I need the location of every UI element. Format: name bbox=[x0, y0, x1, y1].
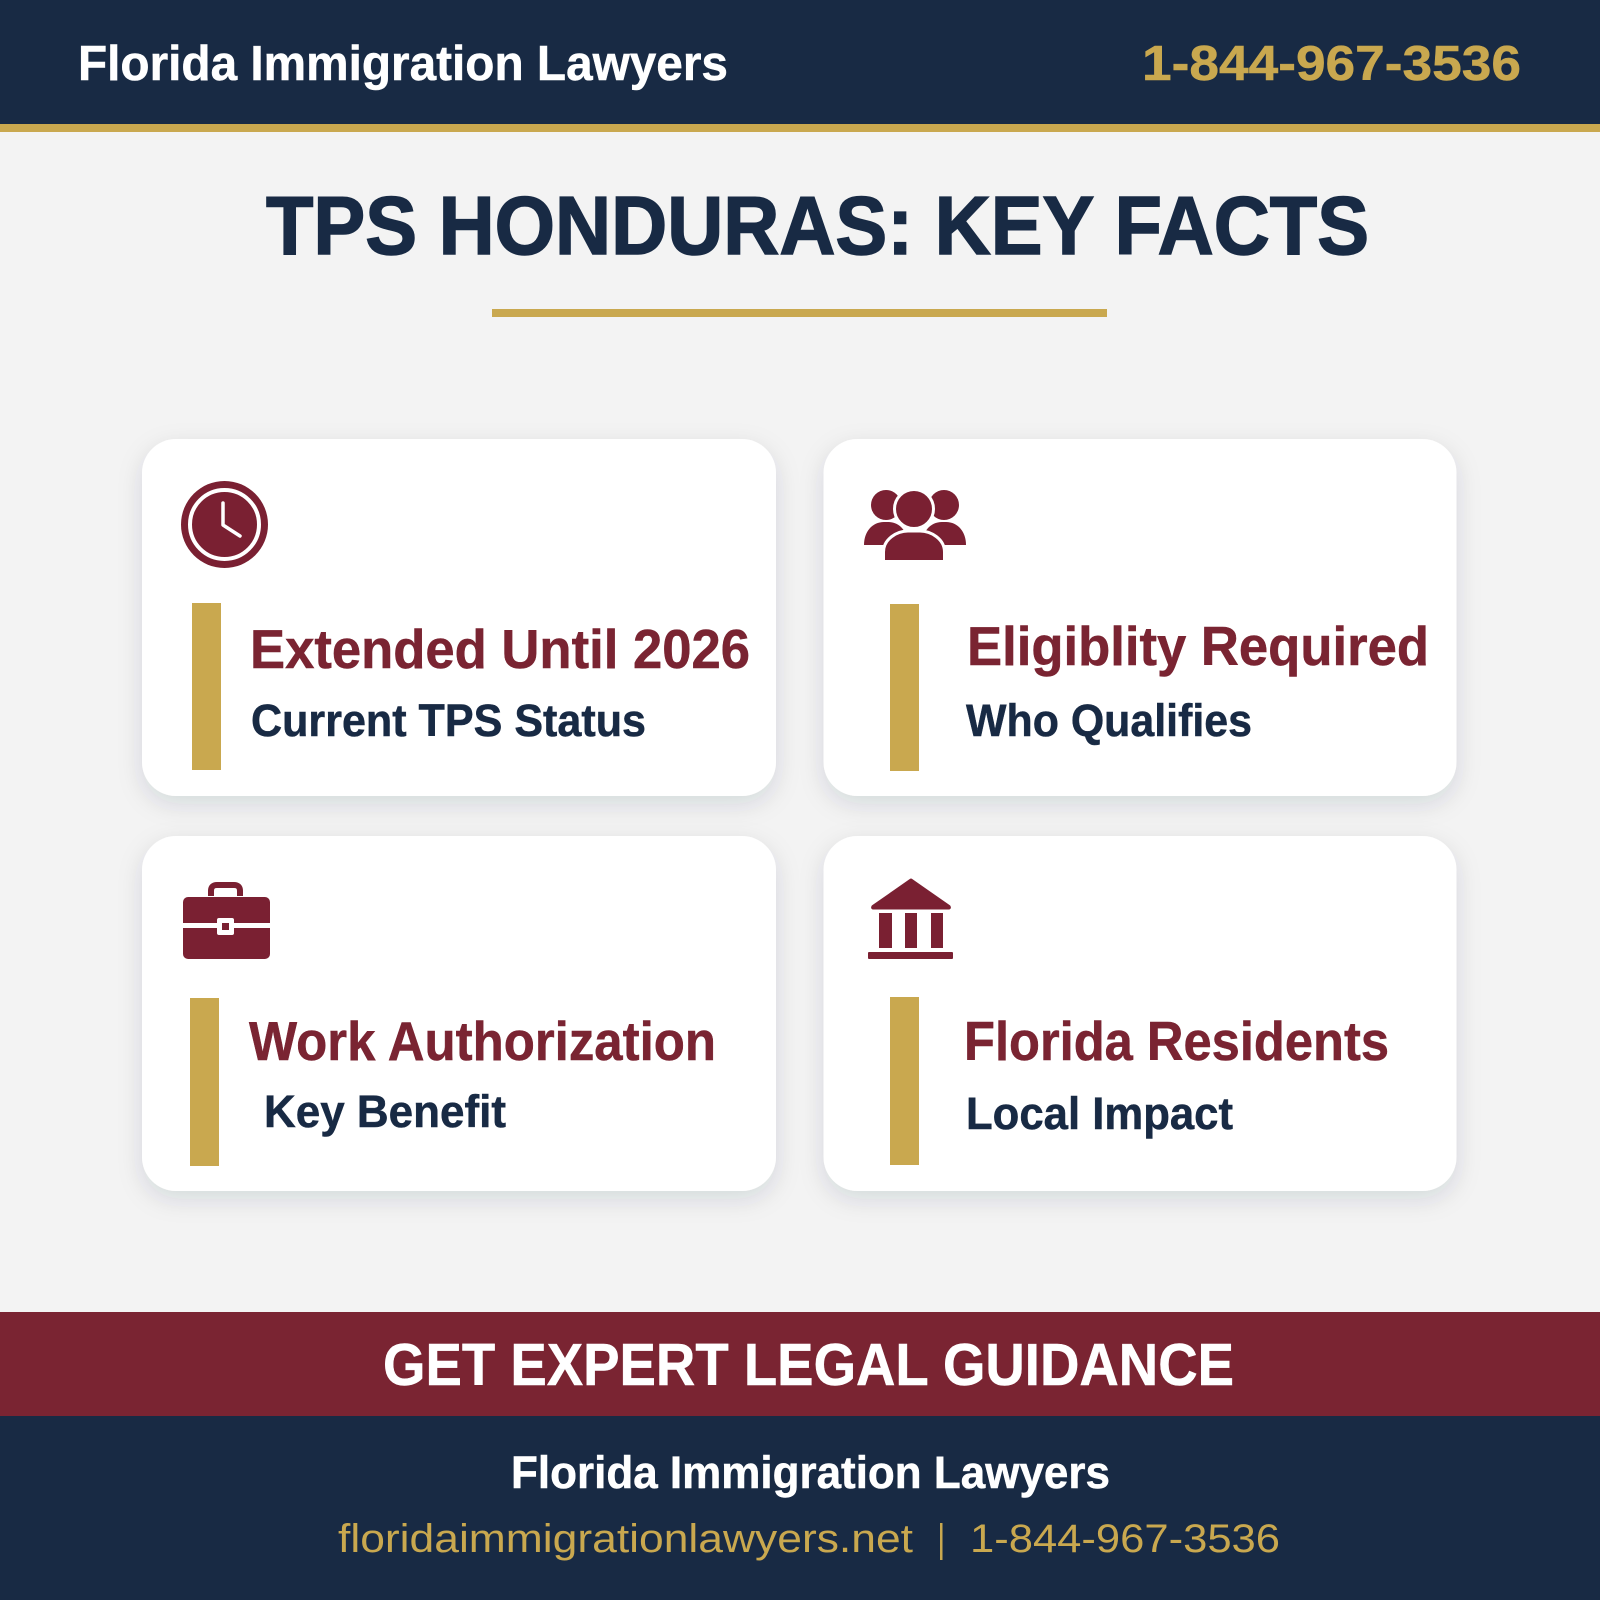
footer firm name: Florida Immigration Lawyers bbox=[511, 1447, 1110, 1498]
card heading: Work Authorization bbox=[249, 1010, 716, 1072]
header bar bbox=[0, 0, 1600, 132]
accent bar bbox=[890, 604, 919, 771]
icon: people bbox=[864, 490, 966, 562]
accent bar bbox=[190, 998, 219, 1166]
icon: courthouse bbox=[868, 880, 953, 959]
call to action band bbox=[0, 1312, 1600, 1416]
card heading: Eligiblity Required bbox=[967, 615, 1429, 677]
header firm name: Florida Immigration Lawyers bbox=[78, 37, 728, 91]
panel: florida residents bbox=[824, 836, 1456, 1191]
card subheading: Local Impact bbox=[966, 1088, 1233, 1139]
header phone number: 1-844-967-3536 bbox=[1142, 37, 1521, 91]
panel: work authorization bbox=[142, 836, 776, 1191]
card subheading: Who Qualifies bbox=[966, 695, 1252, 746]
panel: eligibility required bbox=[824, 439, 1456, 796]
icon: clock bbox=[181, 481, 268, 568]
footer website: floridaimmigrationlawyers.net bbox=[338, 1517, 913, 1561]
icon: briefcase bbox=[183, 885, 270, 959]
card subheading: Current TPS Status bbox=[251, 695, 646, 746]
title underline bbox=[492, 309, 1107, 317]
title: TPS HONDURAS: KEY FACTS bbox=[266, 179, 1369, 272]
footer phone number: 1-844-967-3536 bbox=[970, 1517, 1280, 1561]
call to action text: GET EXPERT LEGAL GUIDANCE bbox=[383, 1332, 1234, 1398]
panel: extended until 2026 bbox=[142, 439, 776, 796]
accent bar bbox=[192, 603, 221, 770]
card subheading: Key Benefit bbox=[264, 1086, 506, 1137]
card heading: Extended Until 2026 bbox=[250, 618, 750, 680]
accent bar bbox=[890, 997, 919, 1165]
footer bbox=[0, 1416, 1600, 1600]
footer separator bbox=[940, 1523, 942, 1560]
card heading: Florida Residents bbox=[964, 1010, 1389, 1072]
